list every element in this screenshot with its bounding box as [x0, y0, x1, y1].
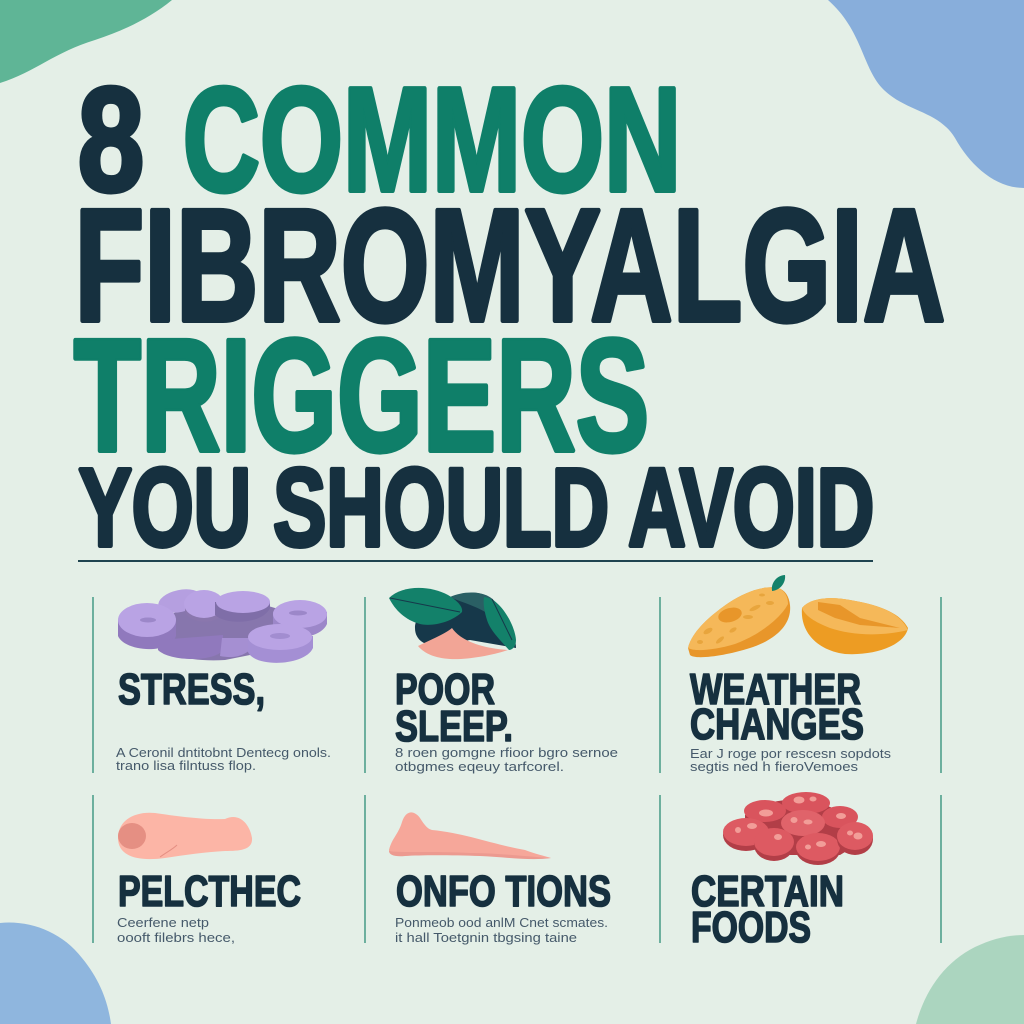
title line: 8 COMMON: COMMON [183, 58, 681, 222]
icon: purple discs [118, 586, 327, 663]
icon: fruit halves [688, 575, 908, 657]
icon: pink wedge [389, 812, 551, 859]
panel: pelcthec [117, 813, 301, 945]
title line: 8 COMMON: 8 [78, 58, 144, 222]
description: stress: A Ceronil dntitobnt Dentecg onols. [116, 745, 331, 760]
description: poor sleep: 8 roen gomgne rfioor bgro sernoe [395, 745, 618, 760]
background blob: bottom left blue [0, 923, 111, 1024]
description: onfo tions: it hall Toetgnin tbgsing taine [395, 930, 577, 945]
description: weather changes: segtis ned h fieroVemoes [690, 759, 859, 774]
heading: poor sleep [395, 666, 513, 751]
description: stress: trano lisa filntuss flop. [116, 758, 256, 773]
description: pelcthec [117, 915, 235, 945]
title line: TRIGGERS: TRIGGERS [74, 306, 649, 484]
background blob: bottom right green [916, 935, 1024, 1024]
icon: red sausage slices [723, 792, 873, 865]
title line: 8 COMMON [78, 58, 681, 222]
heading: poor sleep: POOR [395, 666, 495, 714]
description: poor sleep [395, 745, 618, 774]
heading: pelcthec: PELCTHEC [118, 868, 301, 916]
panel: onfo tions [389, 812, 611, 945]
panel: stress [116, 586, 331, 773]
heading: weather changes: CHANGES [690, 701, 864, 749]
title underline [78, 560, 873, 562]
title [74, 58, 945, 570]
heading: certain foods: CERTAIN [691, 868, 844, 916]
icon: head with leaves [389, 588, 516, 659]
heading: onfo tions: ONFO TIONS [396, 868, 611, 916]
panel: weather changes [688, 575, 908, 774]
description: pelcthec: Ceerfene netp [117, 915, 209, 930]
heading: stress: STRESS, [118, 666, 265, 714]
description: onfo tions: Ponmeob ood anlM Cnet scmates. [395, 915, 608, 930]
background blob: top left green [0, 0, 172, 83]
panel: certain foods [691, 792, 873, 952]
background blob: top right blue [828, 0, 1024, 188]
heading: certain foods: FOODS [691, 904, 811, 952]
description: poor sleep: otbgmes eqeuy tarfcorel. [395, 759, 564, 774]
heading: certain foods [691, 868, 844, 952]
heading: poor sleep: SLEEP. [395, 703, 513, 751]
description: weather changes [690, 746, 892, 774]
description: pelcthec: oooft filebrs hece, [117, 930, 235, 945]
heading: weather changes: WEATHER [690, 666, 861, 714]
heading: weather changes [690, 666, 864, 749]
icon: pink limb [118, 813, 252, 859]
description: weather changes: Ear J roge por rescesn sopdots [690, 746, 892, 761]
description: onfo tions [395, 915, 608, 945]
description: stress [116, 745, 331, 773]
panel: poor sleep [389, 588, 618, 774]
